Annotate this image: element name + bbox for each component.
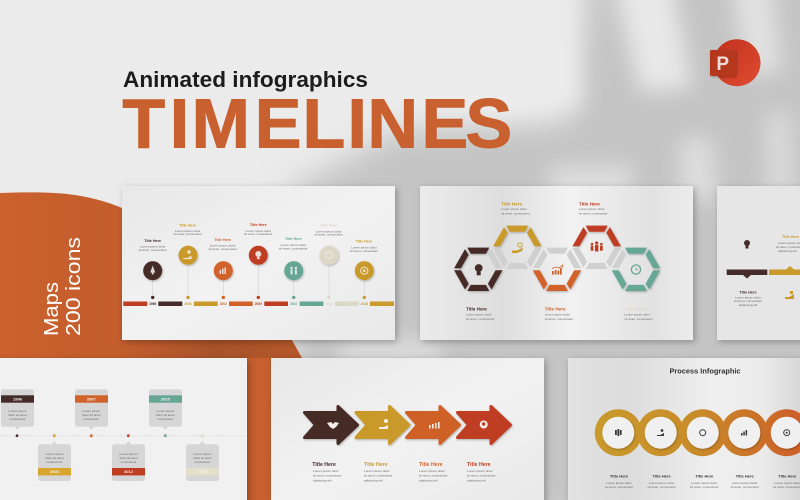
descriptions: dolor sit amet <box>193 456 212 460</box>
timeline dots <box>15 434 204 438</box>
circle labels: Title Here <box>144 239 161 243</box>
years <box>149 302 368 306</box>
arrow labels: Lorem ipsum dolor <box>313 469 339 473</box>
arrow: orange <box>406 406 460 444</box>
callout cards <box>1 389 219 481</box>
ring labels: sit amet, consectetur <box>605 485 633 489</box>
descriptions: consectetur <box>120 460 136 464</box>
arrow labels: Lorem ipsum dolor <box>467 469 493 473</box>
icon: chart <box>429 422 440 428</box>
years: 2015 <box>161 396 171 402</box>
descriptions: consectetur <box>10 417 26 421</box>
panel: hexagon slide <box>420 186 693 340</box>
circle labels: Lorem ipsum dolor <box>245 229 271 233</box>
ring labels <box>605 473 800 489</box>
circle labels: sit amet, consectetur <box>138 248 167 252</box>
vertical label: Maps 200 icons: Maps <box>41 282 63 336</box>
arrow labels: adipiscing elit <box>419 478 438 482</box>
years: 2002 <box>220 302 227 306</box>
arrow labels: Title Here <box>419 462 443 468</box>
arrow labels: adipiscing elit <box>364 478 383 482</box>
dots <box>151 296 366 299</box>
icon: hand coin <box>379 419 388 429</box>
bar: dark <box>727 270 767 278</box>
circle labels: Lorem ipsum dolor <box>210 244 236 248</box>
hexagon labels: sit amet, consectetur <box>579 211 608 215</box>
descriptions <box>8 409 212 464</box>
circle labels: Title Here <box>250 223 267 227</box>
years: 1996 <box>149 302 156 306</box>
arrow labels: sit amet, consectetur <box>419 474 448 478</box>
ring labels: Title Here <box>695 473 714 478</box>
hexagon labels: Lorem ipsum dolor <box>579 207 605 211</box>
ring labels: Title Here <box>736 473 755 478</box>
text: gold column: adipiscing elit <box>778 249 797 253</box>
hexagon labels <box>466 202 653 321</box>
hexagon labels: Lorem ipsum dolor <box>501 207 527 211</box>
descriptions: Lorem ipsum <box>156 409 175 413</box>
descriptions: dolor sit amet <box>8 413 27 417</box>
ring labels: Lorem ipsum dolor <box>732 481 758 485</box>
descriptions: consectetur <box>83 417 99 421</box>
circle labels: Lorem ipsum dolor <box>351 246 377 250</box>
bar: gold <box>769 266 800 275</box>
circles <box>143 246 374 280</box>
hexagon: teal <box>612 248 660 291</box>
years: 2010 <box>290 302 297 306</box>
circle icons <box>150 250 368 274</box>
circle labels: sit amet, consectetur <box>350 249 378 253</box>
years: 2012 <box>124 469 134 474</box>
circle labels: Lorem ipsum dolor <box>280 243 306 247</box>
text: dark column: adipiscing elit <box>739 303 757 307</box>
circle labels: sit amet, consectetur <box>244 232 273 236</box>
circle labels: Title Here <box>179 223 196 227</box>
descriptions: dolor sit amet <box>82 413 101 417</box>
arrow labels: Lorem ipsum dolor <box>419 469 445 473</box>
hexagon: gold <box>493 226 541 246</box>
connectors <box>153 265 364 295</box>
hexagon labels: Title Here <box>579 202 600 206</box>
descriptions: consectetur <box>46 460 62 464</box>
icon: PowerPoint logo <box>710 39 760 86</box>
vertical label: Maps 200 icons: 200 icons <box>63 237 85 336</box>
years: 2000 <box>184 302 192 306</box>
descriptions: dolor sit amet <box>156 413 175 417</box>
circle labels: sit amet, consectetur <box>173 232 202 236</box>
text: dark column: Title Here <box>739 290 757 294</box>
years: 2005 <box>255 302 262 306</box>
text: gold column <box>776 235 800 253</box>
ring chain <box>595 409 800 456</box>
vertical label: Maps 200 icons <box>41 237 85 336</box>
arrow labels: Lorem ipsum dolor <box>364 469 390 473</box>
icon: head <box>480 420 488 428</box>
arrow labels <box>312 462 496 482</box>
arrow labels: Title Here <box>467 462 491 468</box>
circle labels: Lorem ipsum dolor <box>175 229 201 233</box>
orange vertical bar <box>247 358 271 500</box>
hexagon: red <box>572 226 621 246</box>
orange curved shape behind slides <box>0 192 302 500</box>
text: gold column: Title Here <box>782 235 799 239</box>
circle labels: sit amet, consectetur <box>314 233 343 237</box>
ring labels: Title Here <box>653 473 672 478</box>
years: 2018 <box>361 302 368 306</box>
years: 2003 <box>50 469 60 474</box>
slide heading: Process Infographic <box>669 366 741 375</box>
panel: arrow process slide <box>271 358 544 500</box>
hexagon labels: Title Here <box>545 306 566 311</box>
text: dark column: sit amet, consectetur <box>734 299 762 303</box>
ring labels: Lorem ipsum dolor <box>606 481 632 485</box>
ring centers <box>602 417 800 449</box>
icon: PowerPoint logo: P <box>716 54 729 75</box>
gray hexagon segments <box>488 248 626 269</box>
descriptions: dolor sit amet <box>45 456 64 460</box>
ring icons <box>615 429 790 436</box>
hexagon labels: Title Here <box>501 202 523 206</box>
circle labels: Title Here <box>285 237 302 241</box>
icon: people <box>591 241 603 252</box>
arrow labels: Title Here <box>312 462 336 468</box>
years: 2015 <box>325 302 333 306</box>
hexagon labels: sit amet, consectetur <box>624 317 653 321</box>
panel: callout timeline slide <box>0 358 247 500</box>
panel: process infographic slide <box>568 358 800 500</box>
circle labels: Title Here <box>356 240 372 244</box>
icon: handshake <box>327 422 339 429</box>
circle labels: sit amet, consectetur <box>208 247 237 251</box>
hexagon labels: Lorem ipsum dolor <box>545 312 570 316</box>
arrow labels: adipiscing elit <box>313 478 332 482</box>
arrow labels: sit amet, consectetur <box>467 474 496 478</box>
descriptions: dolor sit amet <box>119 456 138 460</box>
years <box>13 396 208 474</box>
subtitle: Animated infographics <box>123 67 368 92</box>
ring labels: Title Here <box>778 473 797 478</box>
descriptions: consectetur <box>194 460 210 464</box>
hexagon: dark <box>454 248 502 291</box>
arrow: red <box>458 406 510 444</box>
hexagon labels: sit amet, consectetur <box>545 317 573 321</box>
timeline axis <box>0 435 247 437</box>
icon: hand small <box>785 291 794 299</box>
ring labels: sit amet, consectetur <box>647 485 676 489</box>
arrow labels: sit amet, consectetur <box>313 474 342 478</box>
hexagon: orange <box>533 270 581 291</box>
hexagon labels: Title Here <box>624 306 646 311</box>
circle labels: Lorem ipsum dolor <box>316 229 342 233</box>
arrow labels: sit amet, consectetur <box>364 474 393 478</box>
descriptions: Lorem ipsum <box>120 452 138 456</box>
descriptions: Lorem ipsum <box>194 452 212 456</box>
text: dark column <box>734 290 762 307</box>
arrow labels: Title Here <box>364 462 388 468</box>
icon: light bulb <box>475 264 483 275</box>
hexagon labels: Lorem ipsum dolor <box>466 312 492 316</box>
descriptions: Lorem ipsum <box>82 409 101 413</box>
ring labels: sit amet, consectetur <box>730 485 759 489</box>
ring labels: sit amet, consectetur <box>690 485 719 489</box>
icon: hand with coin <box>512 243 523 253</box>
circle labels: sit amet, consectetur <box>279 246 308 250</box>
years: 2007 <box>87 396 97 402</box>
circle labels <box>138 223 378 253</box>
arrow: dark <box>304 406 358 444</box>
hexagon labels: sit amet, consectetur <box>466 317 495 321</box>
descriptions: Lorem ipsum <box>46 452 64 456</box>
icon: growth chart <box>552 265 563 275</box>
ring labels: Lorem ipsum dolor <box>774 481 800 485</box>
hexagon labels: sit amet, consectetur <box>501 211 530 215</box>
years: 1996 <box>13 396 23 402</box>
arrow labels: adipiscing elit <box>467 478 486 482</box>
year bands <box>1 395 219 475</box>
timeline bars <box>123 302 394 306</box>
ring labels: Lorem ipsum dolor <box>691 481 717 485</box>
text: dark column: Lorem ipsum dolor <box>735 296 761 300</box>
arrow: gold <box>356 406 409 444</box>
main title: TIMELINES <box>122 85 512 163</box>
circle labels: Title Here <box>320 224 337 228</box>
hexagon labels: Title Here <box>466 306 487 311</box>
circle labels: Title Here <box>214 238 231 242</box>
years: 2019 <box>198 469 208 474</box>
descriptions: Lorem ipsum <box>9 409 27 413</box>
panel: circle timeline slide <box>122 186 395 340</box>
ring labels: Lorem ipsum dolor <box>649 481 675 485</box>
circle labels: Lorem ipsum dolor <box>140 245 166 249</box>
descriptions: consectetur <box>157 417 173 421</box>
ring labels: Title Here <box>610 473 629 478</box>
icon: bulb small <box>744 240 750 248</box>
hexagon labels: Lorem ipsum dolor <box>624 312 650 316</box>
icon: phone clock <box>631 265 641 274</box>
panel: cropped bar timeline slide <box>717 186 800 340</box>
